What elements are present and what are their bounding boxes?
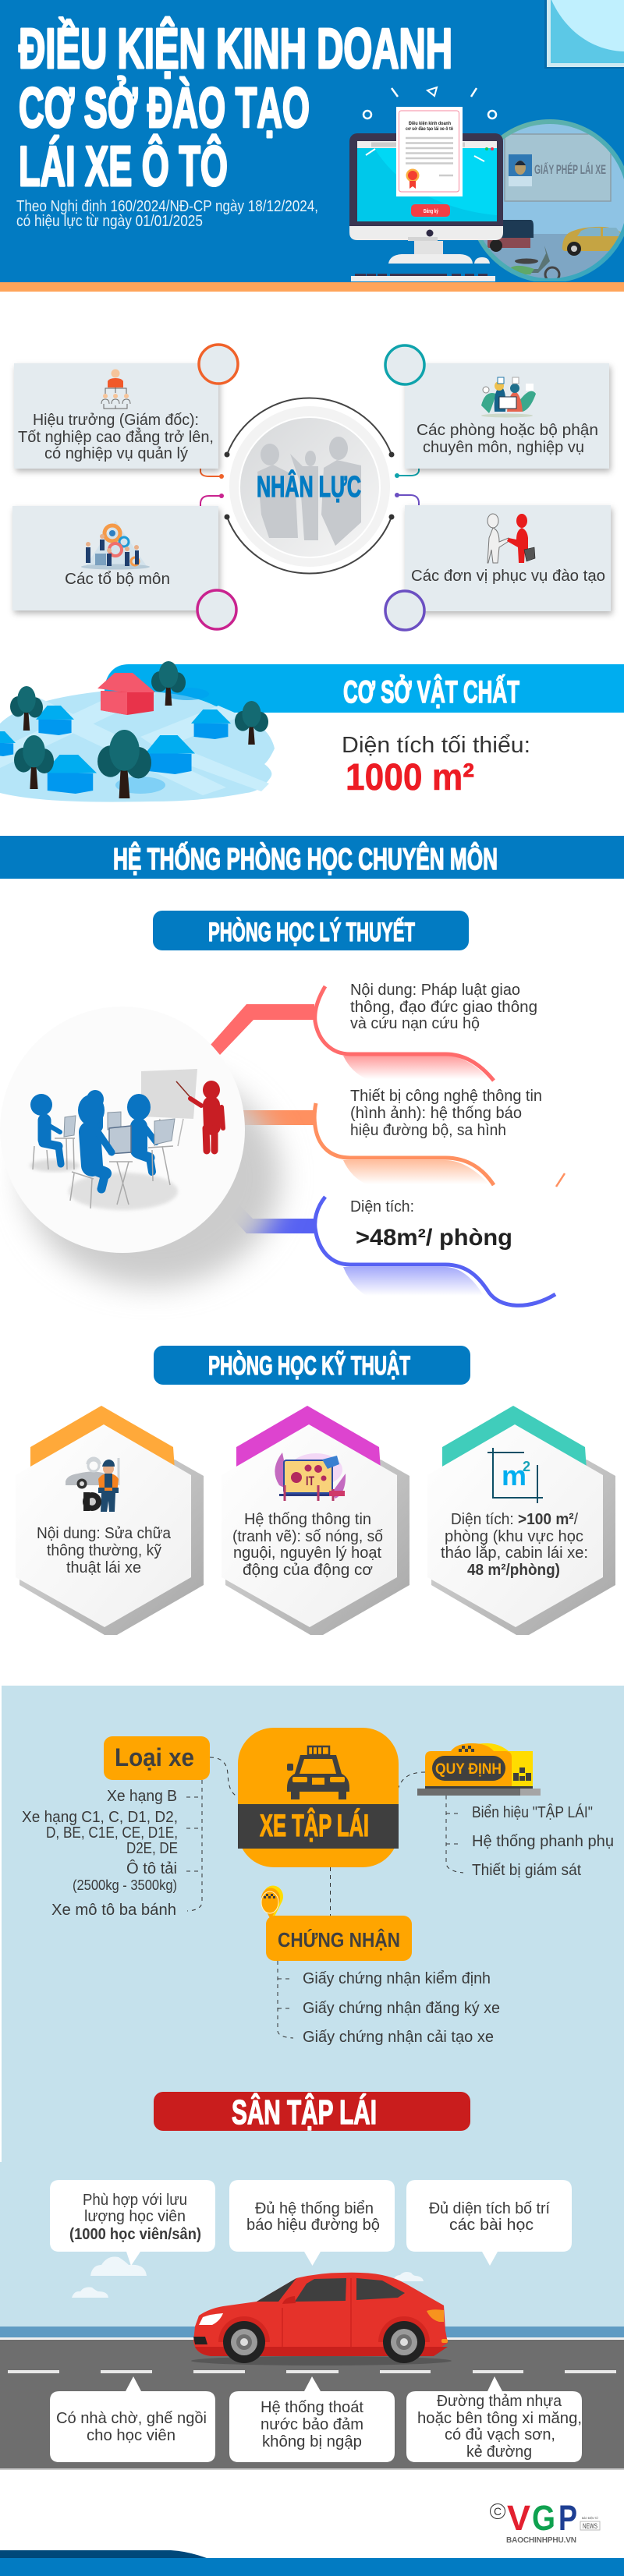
list: loại xe: Xe hạng C1, C, D1, D2, bbox=[22, 1809, 178, 1826]
panel: tổ bộ môn bbox=[12, 506, 218, 610]
logo: VGP news: BAOCHINHPHU.VN bbox=[506, 2536, 576, 2545]
logo: VGP news: NEWS bbox=[583, 2522, 597, 2530]
bubble: diện tích bbox=[406, 2180, 572, 2266]
clouds bbox=[72, 2256, 424, 2298]
bubble: nhà chờ bbox=[50, 2376, 215, 2462]
heading button: PHÒNG HỌC KỸ THUẬT bbox=[208, 1351, 410, 1381]
icon: IT board bbox=[275, 1453, 346, 1501]
heading button: SÂN TẬP LÁI bbox=[232, 2093, 377, 2132]
bubble: thoát nước bbox=[229, 2376, 395, 2462]
heading band bbox=[105, 664, 624, 713]
minimum area text: Diện tích tối thiểu: bbox=[342, 733, 530, 758]
wheels bbox=[223, 2321, 425, 2363]
sky background bbox=[0, 1686, 624, 2327]
section: phòng học lý thuyết bbox=[0, 911, 565, 1305]
bubble: thoát nước: không bị ngập bbox=[262, 2433, 362, 2450]
illustration: classroom bbox=[30, 1069, 223, 1210]
logo: VGP news: BÁO ĐIỆN TỬ bbox=[582, 2516, 598, 2520]
card: thiết bị: hiệu đường bộ, sa hình bbox=[350, 1122, 506, 1139]
icon: m2 frame: 2 bbox=[523, 1459, 530, 1474]
hexagon: thông tin bbox=[222, 1406, 410, 1635]
bubble: lưu lượng bbox=[50, 2180, 215, 2266]
hexagon: sửa chữa bbox=[16, 1406, 204, 1635]
certificate document: Điều kiện kinh doanh bbox=[409, 122, 451, 126]
text bbox=[232, 1511, 383, 1579]
icon: mechanic bbox=[66, 1458, 119, 1512]
minimum area text bbox=[342, 733, 530, 798]
subtitle: có hiệu lực từ ngày 01/01/2025 bbox=[16, 213, 203, 230]
list: loại xe: (2500kg - 3500kg) bbox=[73, 1877, 177, 1893]
bubble: đường thảm nhựa: hoặc bên tông xi măng, bbox=[417, 2410, 582, 2427]
box: loại xe: Loại xe bbox=[115, 1743, 194, 1771]
text: phòng (khu vực học bbox=[445, 1528, 583, 1545]
text: Tốt nghiệp cao đẳng trở lên, bbox=[18, 427, 214, 446]
icon: IT board: IT bbox=[306, 1474, 314, 1488]
section: nhân lực bbox=[12, 345, 611, 630]
driving licence round picture bbox=[477, 119, 624, 281]
section: phòng học kỹ thuật bbox=[16, 1346, 615, 1635]
certificate document bbox=[396, 107, 463, 196]
road bbox=[0, 2327, 624, 2470]
text: 48 m²/phòng) bbox=[467, 1562, 560, 1579]
panel: phòng bộ phận bbox=[405, 363, 609, 469]
bubble: đường thảm nhựa: Đường thảm nhựa bbox=[437, 2393, 562, 2410]
minimum area text: 1000 m² bbox=[346, 757, 474, 798]
icon: taxi bbox=[287, 1746, 349, 1799]
list: quy định: Thiết bị giám sát bbox=[472, 1862, 581, 1879]
text bbox=[417, 422, 598, 456]
icon: organisation bbox=[101, 370, 130, 409]
dashed connectors bbox=[186, 1757, 463, 2038]
figure: teacher bbox=[190, 1081, 223, 1151]
bubble: thoát nước: nước bảo đảm bbox=[261, 2416, 363, 2433]
box: chứng nhận bbox=[261, 1886, 412, 1961]
centre circle bbox=[225, 398, 395, 574]
section: cơ sở vật chất bbox=[0, 661, 624, 802]
bubble: biển báo: Đủ hệ thống biển bbox=[255, 2200, 374, 2217]
illustration: red car bbox=[191, 2273, 452, 2365]
panel: hiệu trưởng bbox=[14, 363, 218, 469]
logo: VGP news: V bbox=[507, 2498, 530, 2538]
icon: gears team bbox=[81, 521, 150, 569]
bubble: nhà chờ: Có nhà chờ, ghế ngồi bbox=[56, 2410, 207, 2427]
subtitle: Theo Nghị định 160/2024/NĐ-CP ngày 18/12/2024, bbox=[16, 198, 318, 215]
icon: handshake bbox=[488, 514, 535, 563]
taxi sign: quy định bbox=[417, 1743, 541, 1796]
text: tháo lắp, cabin lái xe: bbox=[441, 1544, 588, 1562]
text: Hệ thống thông tin bbox=[244, 1511, 371, 1528]
list: loại xe bbox=[22, 1788, 178, 1919]
logo: VGP news: C bbox=[494, 2505, 502, 2518]
bubble: biển báo bbox=[229, 2180, 395, 2266]
card: diện tích bbox=[315, 1197, 555, 1305]
list: quy định bbox=[472, 1803, 614, 1879]
connectors bbox=[211, 1004, 315, 1233]
card: nội dung bbox=[315, 982, 537, 1081]
text: chuyên môn, nghiệp vụ bbox=[423, 439, 584, 456]
list: chứng nhận bbox=[303, 1970, 500, 2046]
panel: đơn vị phục vụ bbox=[405, 505, 611, 611]
text: Các tổ bộ môn bbox=[65, 571, 170, 588]
bubble: đường thảm nhựa bbox=[406, 2376, 582, 2462]
bubble: lưu lượng: (1000 học viên/sân) bbox=[69, 2226, 201, 2243]
list: loại xe: Xe mô tô ba bánh bbox=[51, 1902, 176, 1919]
bubble: đường thảm nhựa: kẻ đường bbox=[466, 2443, 532, 2461]
section: xe tập lái bbox=[22, 1728, 614, 2046]
title bbox=[19, 17, 452, 198]
ring: purple bbox=[385, 591, 424, 630]
card: thiết bị bbox=[314, 1088, 565, 1187]
list: chứng nhận: Giấy chứng nhận đăng ký xe bbox=[303, 2000, 500, 2017]
banner: hệ thống phòng học bbox=[0, 836, 624, 879]
card: diện tích: >48m²/ phòng bbox=[356, 1225, 512, 1251]
list: loại xe: D, BE, C1E, CE, D1E, bbox=[46, 1824, 178, 1842]
bubble: biển báo: báo hiệu đường bộ bbox=[246, 2217, 380, 2234]
bubble: diện tích: các bài học bbox=[449, 2217, 534, 2234]
card: diện tích: Diện tích: bbox=[350, 1198, 414, 1215]
heading button bbox=[154, 2092, 470, 2132]
ring: magenta bbox=[197, 590, 236, 629]
text: có nghiệp vụ quản lý bbox=[44, 445, 188, 462]
box: loại xe bbox=[104, 1736, 210, 1780]
text: thông thường, kỹ bbox=[47, 1542, 161, 1559]
computer monitor bbox=[349, 133, 503, 281]
text: (tranh vẽ): số nóng, số bbox=[232, 1528, 383, 1545]
taxi sign: quy định: QUY ĐỊNH bbox=[435, 1761, 502, 1778]
section: sân tập lái bbox=[0, 2092, 624, 2470]
bubble: thoát nước: Hệ thống thoát bbox=[261, 2399, 363, 2416]
certificate document: cơ sở đào tạo lái xe ô tô bbox=[406, 127, 453, 132]
centre card: xe tập lái: XE TẬP LÁI bbox=[260, 1807, 369, 1843]
icon: m2 frame: m bbox=[502, 1460, 526, 1491]
header banner bbox=[0, 0, 624, 292]
bubble: nhà chờ: cho học viên bbox=[87, 2427, 176, 2444]
ring: orange bbox=[199, 345, 238, 384]
ring: teal bbox=[385, 345, 424, 384]
heading button bbox=[153, 911, 469, 950]
picture frame top right bbox=[544, 0, 624, 69]
list: loại xe: D2E, DE bbox=[126, 1840, 178, 1857]
box: chứng nhận: CHỨNG NHẬN bbox=[278, 1928, 400, 1951]
text: Các phòng hoặc bộ phận bbox=[417, 422, 598, 439]
text: động của động cơ bbox=[243, 1562, 373, 1579]
card: nội dung: thông, đạo đức giao thông bbox=[350, 999, 537, 1016]
text: Hiệu trưởng (Giám đốc): bbox=[33, 412, 199, 429]
figure: students bbox=[30, 1090, 156, 1172]
computer monitor: Đăng ký bbox=[424, 209, 438, 214]
circle shadow bbox=[23, 1068, 281, 1286]
text: Nội dung: Sửa chữa bbox=[37, 1525, 172, 1542]
card: thiết bị: (hình ảnh): hệ thống báo bbox=[350, 1105, 522, 1122]
logo: VGP news: P bbox=[558, 2498, 577, 2538]
logo: VGP news: G bbox=[532, 2498, 555, 2538]
list: chứng nhận: Giấy chứng nhận cải tạo xe bbox=[303, 2029, 494, 2046]
icon: taxi pin bbox=[261, 1886, 283, 1920]
text: nguội, nguyên lý hoạt bbox=[233, 1545, 381, 1562]
logo: VGP news bbox=[490, 2498, 600, 2545]
card: thiết bị: Thiết bị công nghệ thông tin bbox=[350, 1088, 542, 1105]
heading band: CƠ SỞ VẬT CHẤT bbox=[343, 674, 519, 709]
text: thuật lái xe bbox=[66, 1559, 141, 1576]
text: Các đơn vị phục vụ đào tạo bbox=[411, 568, 605, 585]
sparkles bbox=[363, 87, 496, 119]
hexagon: diện tích bbox=[427, 1406, 615, 1635]
bubble: diện tích: Đủ diện tích bố trí bbox=[429, 2200, 550, 2217]
heading button: PHÒNG HỌC LÝ THUYẾT bbox=[208, 918, 415, 947]
text bbox=[18, 412, 214, 462]
centre circle: NHÂN LỰC bbox=[257, 469, 361, 504]
list: chứng nhận: Giấy chứng nhận kiểm định bbox=[303, 1970, 491, 1987]
title: LÁI XE Ô TÔ bbox=[19, 135, 228, 198]
text bbox=[37, 1525, 172, 1576]
title: CƠ SỞ ĐÀO TẠO bbox=[19, 76, 310, 140]
heading button bbox=[154, 1346, 470, 1385]
card: nội dung: và cứu nạn cứu hộ bbox=[350, 1015, 480, 1032]
card: nội dung: Nội dung: Pháp luật giao bbox=[350, 982, 520, 999]
list: loại xe: Ô tô tải bbox=[126, 1859, 177, 1877]
text bbox=[441, 1511, 588, 1579]
bubble: lưu lượng: Phù hợp với lưu bbox=[83, 2192, 187, 2209]
subtitle bbox=[16, 198, 318, 230]
classroom circle bbox=[0, 1007, 245, 1253]
text: Diện tích: >100 m²/ bbox=[451, 1511, 578, 1528]
list: quy định: Biển hiệu "TẬP LÁI" bbox=[472, 1803, 593, 1821]
footer band bbox=[0, 2550, 624, 2576]
icon: m2 frame bbox=[488, 1448, 543, 1503]
centre card: xe tập lái bbox=[238, 1728, 399, 1867]
list: quy định: Hệ thống phanh phụ bbox=[472, 1833, 614, 1850]
bubble: lưu lượng: lượng học viên bbox=[84, 2208, 186, 2225]
icon: team at screen bbox=[481, 377, 536, 418]
bubble: đường thảm nhựa: có đủ vạch sơn, bbox=[445, 2426, 555, 2443]
list: loại xe: Xe hạng B bbox=[107, 1788, 177, 1805]
illustration: town bbox=[0, 661, 275, 802]
connectors bbox=[200, 469, 419, 506]
icon: red house bbox=[98, 673, 155, 715]
